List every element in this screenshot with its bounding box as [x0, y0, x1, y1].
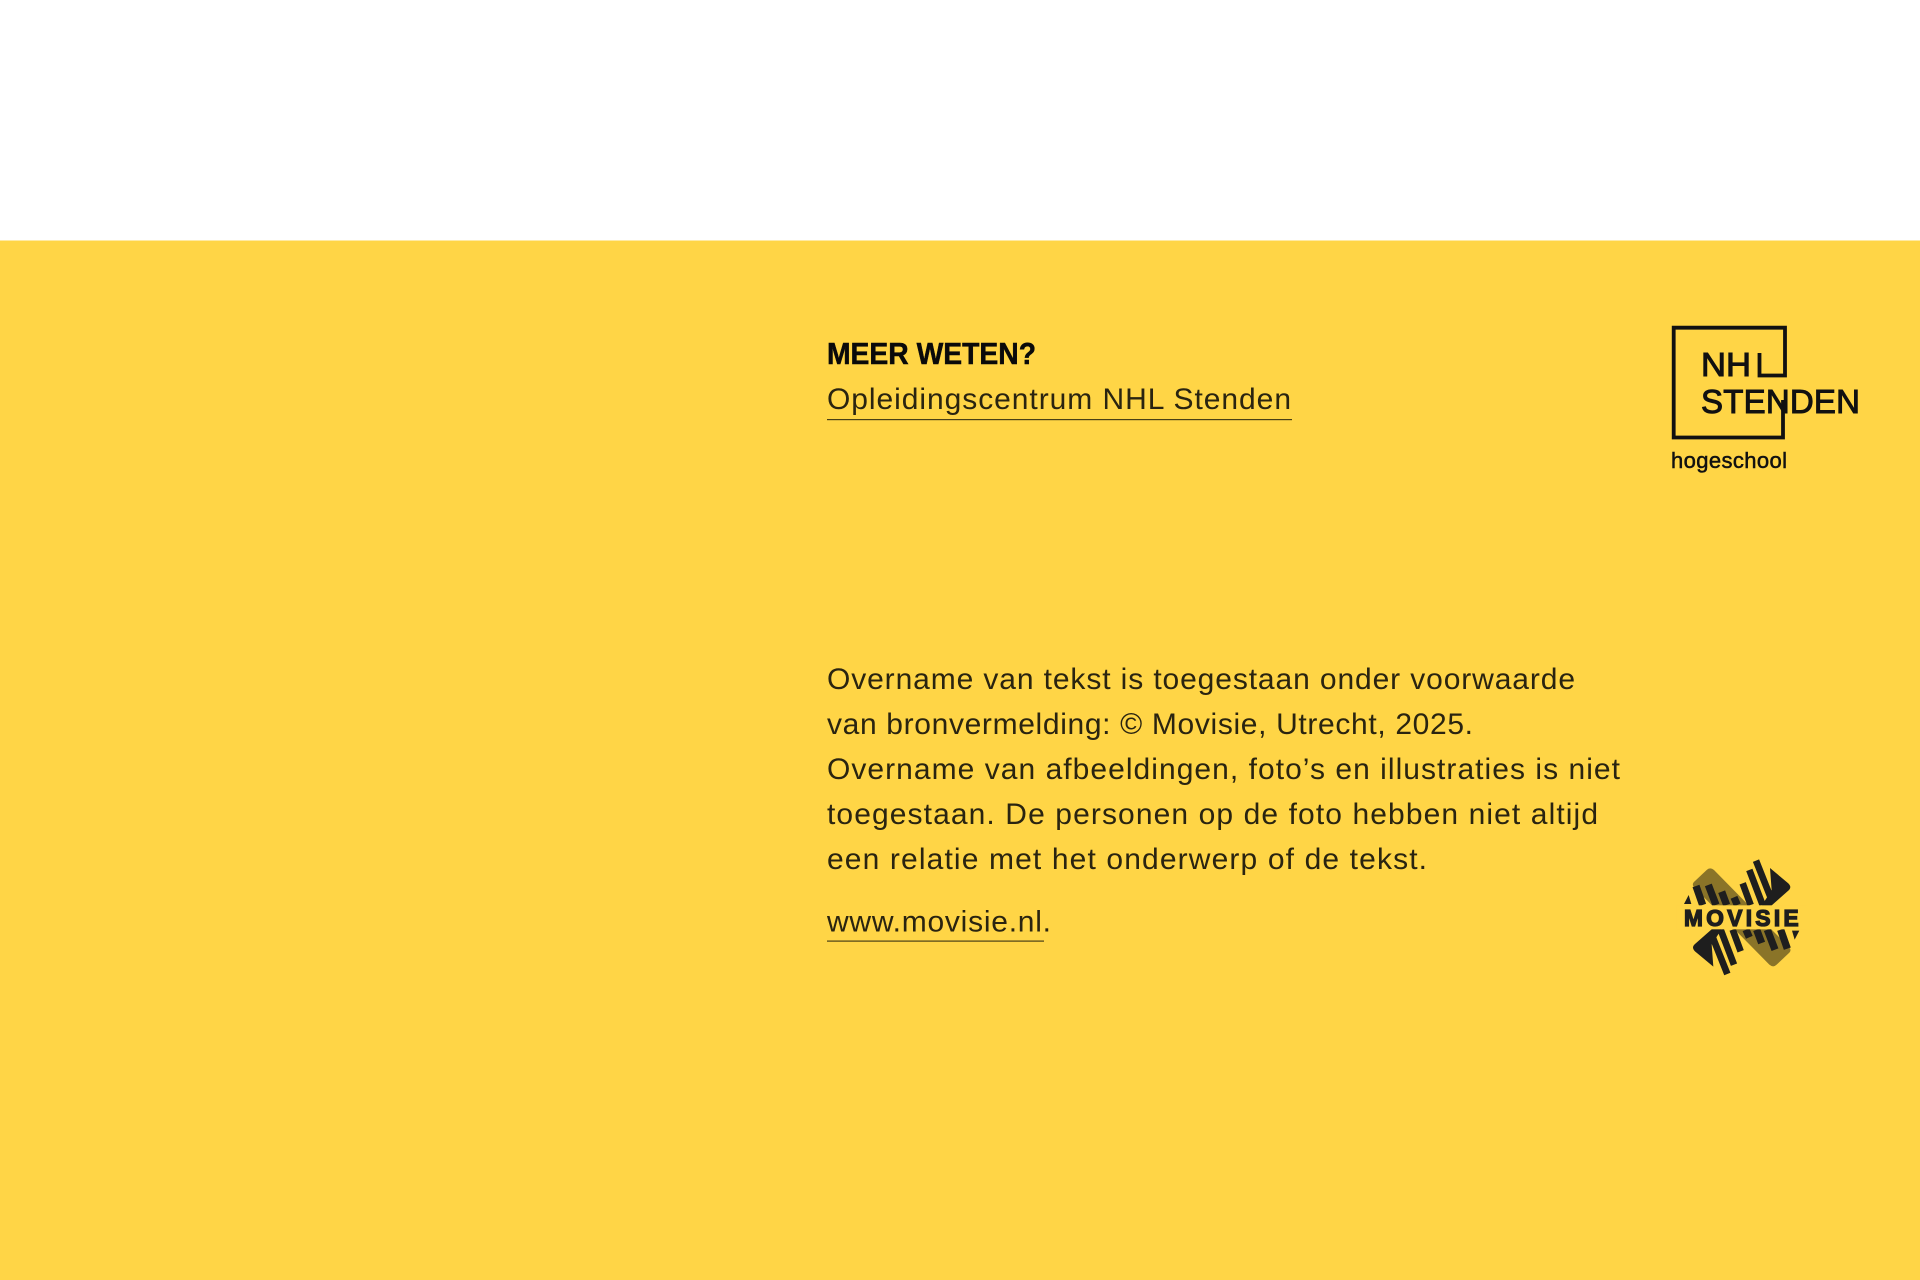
- link: opleidingscentrum: Opleidingscentrum NHL Stenden: [827, 383, 1291, 416]
- link: movisie website: www.movisie.nl.: [826, 906, 1051, 938]
- logo: NHL Stenden: [1671, 328, 1860, 473]
- logo: NHL Stenden: hogeschool: [1671, 448, 1787, 473]
- logo: NHL Stenden: NH: [1701, 346, 1751, 383]
- heading: meer weten: MEER WETEN?: [827, 336, 1036, 371]
- logo: Movisie: [1677, 861, 1807, 974]
- text block: copyright notice: een relatie met het onderwerp of de tekst.: [827, 843, 1427, 876]
- logo: Movisie: MOVISIE: [1684, 905, 1799, 931]
- text block: copyright notice: van bronvermelding: © Movisie, Utrecht, 2025.: [827, 708, 1473, 741]
- text block: copyright notice: Overname van afbeeldingen, foto’s en illustraties is niet: [827, 753, 1621, 786]
- logo: NHL Stenden: STENDEN: [1701, 383, 1860, 420]
- text block: copyright notice: [827, 663, 1621, 876]
- text block: copyright notice: Overname van tekst is toegestaan onder voorwaarde: [827, 663, 1575, 696]
- text block: copyright notice: toegestaan. De personen op de foto hebben niet altijd: [827, 798, 1598, 831]
